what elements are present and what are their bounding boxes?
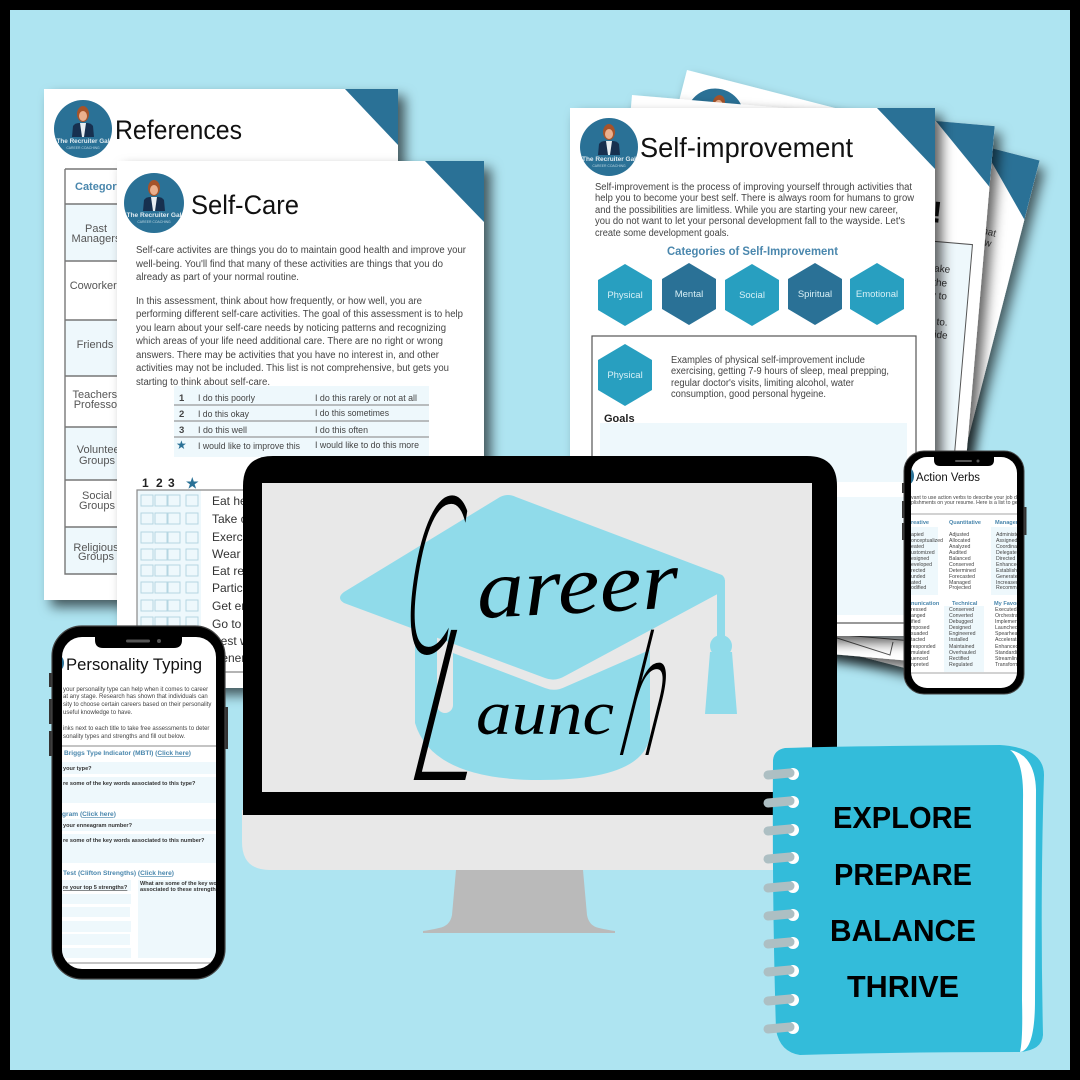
phone screen: responded: [911, 644, 936, 650]
phone screen: at any stage. Research has shown that individuals can: [63, 694, 208, 700]
cropped box text: make: [925, 263, 951, 276]
phone screen: ified: [911, 619, 921, 625]
monitor screen: [262, 483, 812, 792]
cropped box text: y to: [930, 290, 948, 303]
phone screen: re some of the key words associated to this type?: [63, 781, 196, 787]
logo: The Recruiter Gal: [126, 212, 182, 219]
goals label: Goals: [604, 413, 635, 425]
phone screen: tacted: [911, 637, 925, 643]
intro text: [135, 245, 467, 388]
phone: Action Verbs: [902, 451, 1031, 694]
phone screen: Technical: [952, 601, 978, 607]
monitor: [242, 456, 837, 933]
title: Self-Care: [191, 190, 299, 220]
phone screen: reative: [911, 520, 929, 526]
hexagon: Spiritual: Spiritual: [798, 289, 832, 300]
references table: Managers: [72, 233, 121, 245]
checklist: Exercise: [212, 530, 258, 544]
phone screen: [62, 637, 216, 969]
phone screen: Audited: [949, 550, 967, 556]
rating legend table: ★: [176, 438, 187, 452]
rating legend table: I do this poorly: [198, 393, 255, 404]
phone screen: onceptualized: [911, 538, 943, 544]
physical description: [671, 355, 889, 400]
phone screen: Engineered: [949, 631, 976, 637]
phone screen: Delegated: [996, 550, 1020, 556]
rating legend table: I would like to improve this: [198, 441, 300, 452]
phone screen: Transformed: [995, 662, 1024, 668]
phone screen: npreted: [911, 662, 929, 668]
checklist: Rest well: [212, 634, 261, 648]
phone body: [904, 451, 1024, 694]
script title: Career Launch: areer: [474, 534, 681, 637]
phone screen: Quantitative: [949, 520, 981, 526]
intro text: help you to become your best self. There is always room for humans to grow: [595, 193, 915, 204]
phone body: [52, 626, 225, 979]
rating legend table: I do this rarely or not at all: [315, 393, 417, 404]
tassel: [705, 580, 737, 714]
script title: Career Launch: aunc: [476, 680, 614, 748]
references table: Friends: [77, 339, 114, 351]
script title: Career Launch: L: [386, 590, 517, 829]
tinted box: [608, 216, 972, 643]
hexagon: Mental: [662, 263, 716, 325]
phone screen: Generated: [996, 574, 1021, 580]
phone screen: Action Verbs: [916, 472, 980, 484]
rating legend table: I do this okay: [198, 409, 249, 420]
logo: CAREER COACHING: [592, 164, 626, 168]
physical goals box: [592, 336, 916, 623]
phone screen: Overhauled: [949, 650, 976, 656]
side buttons: [902, 483, 1026, 540]
physical description: regular doctor's visits, limiting alcohol, water: [671, 378, 855, 389]
rating legend table: 1: [179, 393, 185, 404]
phone screen: Debugged: [949, 619, 973, 625]
title: Self-improvement: [640, 132, 853, 163]
graduation cap logo: [340, 495, 737, 780]
phone screen: Standardized: [995, 650, 1026, 656]
notebook words: EXPLORE: [833, 800, 972, 835]
physical description: consumption, good personal hygeine.: [671, 389, 826, 400]
cap board: [340, 495, 725, 680]
phone screen: Briggs Type Indicator (MBTI) (Click here): [64, 750, 191, 757]
phone screen: your enneagram number?: [63, 823, 133, 829]
phone screen: apied: [911, 532, 924, 538]
hexagon: Emotional: Emotional: [856, 289, 898, 300]
intro text: already as part of your normal routine.: [136, 272, 299, 283]
panel: References worksheet page: [44, 89, 398, 600]
phone screen: Assigned: [996, 538, 1017, 544]
phone screen: Installed: [949, 637, 968, 643]
monitor stand: [423, 870, 615, 933]
phone screen: My Favorites: [994, 601, 1028, 607]
phone screen: rected: [911, 568, 926, 574]
phone screen: Adjusted: [949, 532, 969, 538]
corner triangle: [967, 146, 1040, 220]
panel: Self-Care worksheet page: [117, 161, 484, 688]
cropped box text: [920, 263, 954, 342]
notebook cover: [773, 745, 1044, 1055]
script title: Career Launch: h: [602, 601, 694, 794]
phone screen: [911, 457, 1017, 688]
cropped box text: side: [929, 329, 948, 342]
logo: CAREER COACHING: [66, 146, 100, 150]
phone screen: Spearheaded: [995, 631, 1026, 637]
hexagon: Emotional: [850, 263, 904, 325]
phone screen: Recommended: [996, 585, 1031, 591]
intro text: Self-improvement is the process of improving yourself through activities that: [595, 182, 912, 193]
logo: CAREER COACHING: [137, 220, 171, 224]
panel: middle fanned worksheet page: [586, 95, 995, 664]
intro text: you do not want to let your personal development fall to the wayside. Let's: [595, 216, 905, 227]
phone screen: Regulated: [949, 662, 973, 668]
phone screen: Test (Clifton Strengths) (Click here): [63, 870, 174, 877]
hexagon: Physical large: Physical: [607, 370, 643, 381]
phone screen: Maintained: [949, 644, 974, 650]
phone screen: Determined: [949, 568, 976, 574]
phone screen: Personality Typing: [66, 655, 202, 674]
phone screen: re your top 5 strengths?: [63, 885, 128, 891]
phone screen: anged: [911, 613, 926, 619]
references table: [65, 169, 128, 574]
phone screen: Orchestrated: [995, 613, 1025, 619]
checklist: General: [212, 651, 255, 665]
spiral rings: [768, 768, 799, 1034]
phone screen: Balanced: [949, 556, 971, 562]
phone screen: suaded: [911, 631, 928, 637]
hexagon: Physical: [598, 264, 652, 326]
phone screen: mulated: [911, 650, 930, 656]
checklist: Participate: [212, 581, 269, 595]
goals fields: [600, 423, 907, 615]
phone screen: esigned: [911, 556, 929, 562]
intro text: and the possibilities are limitless. While you are starting your new career,: [595, 205, 898, 216]
references table: Groups: [79, 455, 116, 467]
references table: Coworkers: [70, 280, 123, 292]
intro text: you learn about your self-care needs by noticing patterns and recognizing: [136, 323, 446, 334]
phone screen: Forecasted: [949, 574, 975, 580]
corner triangle: [931, 121, 995, 187]
logo: [636, 106, 699, 169]
checklist: Go to: [212, 617, 242, 631]
logo: [580, 118, 638, 176]
title: References: [115, 115, 242, 145]
checklist: Eat regularly: [212, 564, 279, 578]
rating legend table: I do this often: [315, 425, 368, 436]
rating legend table: I do this well: [198, 425, 247, 436]
phone screen: re some of the key words associated to this number?: [63, 838, 205, 844]
references table: Past: [85, 223, 107, 235]
monitor chin: [242, 810, 837, 870]
corner triangle: [877, 108, 935, 169]
intro text: performing different self-care activities. The goal of this assessment is to help: [136, 309, 463, 320]
checklist: Wear clean: [212, 547, 272, 561]
checklist: Take care: [212, 512, 264, 526]
side buttons: [49, 673, 228, 756]
intro text: which areas of your life need additional care. There are no right or wrong: [135, 336, 443, 347]
notebook words: BALANCE: [830, 913, 976, 948]
phone screen: Coordinated: [996, 544, 1024, 550]
phone screen: ustomized: [911, 550, 935, 556]
checklist: Get enough: [212, 599, 275, 613]
cap base: [415, 620, 650, 780]
references table: Religious: [73, 542, 119, 554]
phone screen: Enhanced: [996, 562, 1019, 568]
physical description: exercising, getting 7-9 hours of sleep, meal prepping,: [671, 366, 889, 377]
phone screen: inks next to each title to take free assessments to deter: [63, 726, 209, 732]
corner triangle: [425, 161, 484, 222]
phone screen: Executed: [995, 607, 1017, 613]
hexagon: Social: Social: [739, 290, 765, 301]
phone screen: Increased: [996, 580, 1019, 586]
notebook pages edge: [1010, 750, 1036, 1052]
cropped body text: [972, 224, 997, 250]
rating legend table: 2: [179, 409, 184, 420]
phone screen: Rectified: [949, 656, 969, 662]
references table: Social: [82, 490, 112, 502]
phone screen: Conserved: [949, 562, 974, 568]
checklist: 1: [142, 476, 149, 490]
hexagon: Social: [725, 264, 779, 326]
cropped box text: r to.: [930, 316, 948, 329]
monitor bezel: [243, 456, 837, 815]
phone screen: Allocated: [949, 538, 970, 544]
phone screen: vant to use action verbs to describe your job duties: [911, 495, 1028, 501]
cap gap band: [437, 600, 700, 713]
notch: [95, 637, 182, 648]
hexagon: Spiritual: [788, 263, 842, 325]
speaker: [126, 639, 161, 643]
logo: [124, 173, 184, 233]
intro text: In this assessment, think about how frequently, or how well, you are: [136, 296, 422, 307]
phone screen: your personality type can help when it comes to career: [63, 687, 208, 693]
logo: [680, 82, 750, 153]
fanned page fold lines: [837, 638, 893, 655]
intro text: create some development goals.: [595, 228, 729, 239]
rating legend table: I would like to do this more: [315, 440, 419, 451]
phone screen: Management: [995, 520, 1029, 526]
notch: [934, 457, 994, 466]
phone screen: Analyzed: [949, 544, 970, 550]
phone screen: unded: [911, 574, 926, 580]
panel: Self-improvement worksheet page: [570, 108, 935, 636]
phone screen: sonality types and strengths and fill out below.: [63, 734, 185, 740]
references table: Groups: [78, 551, 115, 563]
phone screen: Enhanced: [995, 644, 1018, 650]
phone screen: Directed: [996, 556, 1015, 562]
notebook words: THRIVE: [847, 969, 959, 1004]
references table: Volunteer: [77, 444, 124, 456]
rating legend table: 3: [179, 425, 184, 436]
checklist: 3: [168, 476, 175, 490]
intro text: Self-care activites are things you do to maintain good health and improve your: [136, 245, 467, 256]
panel: rear fanned worksheet page: [556, 70, 1040, 669]
phone screen: What are some of the key words: [140, 881, 225, 887]
phone screen: Conserved: [949, 607, 974, 613]
notebook: [768, 745, 1044, 1055]
logo: [54, 100, 112, 158]
phone screen: nunication: [911, 601, 940, 607]
references table: Teachers &: [72, 389, 128, 401]
phone screen: Launched: [995, 625, 1018, 631]
notebook words: [830, 800, 976, 1004]
cropped box text: e: [929, 300, 936, 312]
cropped box text: the: [933, 277, 948, 290]
hexagon: Physical large: [598, 344, 652, 406]
categories heading: Categories of Self-Improvement: [667, 246, 838, 258]
phone screen: uenced: [911, 656, 928, 662]
intro text: activities may not be included. This list is not comprehensive, but gets you: [136, 363, 449, 374]
physical description: Examples of physical self-improvement include: [671, 355, 865, 366]
phone: Personality Typing: [49, 626, 228, 979]
checklist: ★: [186, 475, 199, 491]
phone screen: Accelerated: [995, 637, 1023, 643]
phone screen: Established: [996, 568, 1023, 574]
notebook words: PREPARE: [834, 857, 972, 892]
intro text: answers. There may be activities that you have no interest in, and other: [136, 350, 440, 361]
hexagon: Physical: Physical: [607, 290, 643, 301]
cropped body text: how: [972, 235, 993, 250]
speaker: [955, 460, 980, 462]
intro text: well-being. You'll find that many of these activities are things that you do: [135, 259, 443, 270]
logo: The Recruiter Gal: [582, 156, 636, 163]
phone screen: odified: [911, 585, 926, 591]
cropped body text: that: [978, 225, 997, 240]
heading fragment: !: [931, 196, 943, 230]
phone screen: Streamlined: [995, 656, 1023, 662]
checklist: Eat healthy: [212, 494, 272, 508]
phone screen: sity to choose certain careers based on their personality: [63, 702, 211, 708]
logo: The Recruiter Gal: [56, 138, 110, 145]
phone screen: plishments on your resume. Here is a list to get you: [911, 500, 1029, 506]
references table: Professors: [74, 399, 127, 411]
rating legend table: [174, 386, 429, 457]
hexagon: Mental: Mental: [675, 289, 703, 300]
intro text: [595, 182, 915, 239]
phone screen: mposed: [911, 625, 930, 631]
rating legend table: I do this sometimes: [315, 408, 389, 419]
references table: Groups: [79, 500, 116, 512]
phone screen: your type?: [63, 766, 92, 772]
phone screen: Implemented: [995, 619, 1025, 625]
checklist: 2: [156, 476, 163, 490]
checklist: [137, 475, 279, 672]
intro text: starting to think about self-care.: [136, 377, 270, 388]
script title: Career Launch: C: [388, 456, 480, 702]
phone screen: ated: [911, 580, 921, 586]
phone screen: Converted: [949, 613, 973, 619]
phone screen: Designed: [949, 625, 971, 631]
phone screen: Managed: [949, 580, 971, 586]
phone screen: eated: [911, 544, 924, 550]
phone screen: associated to these strengths?: [140, 887, 223, 893]
phone screen: Projected: [949, 585, 971, 591]
phone screen: ressed: [911, 607, 927, 613]
script title: Career Launch: [386, 456, 694, 829]
references table: Category: [75, 181, 124, 193]
phone screen: eveloped: [911, 562, 932, 568]
phone screen: useful knowledge to have.: [63, 710, 133, 716]
phone screen: Administered: [996, 532, 1026, 538]
corner triangle: [345, 89, 398, 145]
phone screen: gram (Click here): [62, 811, 116, 818]
